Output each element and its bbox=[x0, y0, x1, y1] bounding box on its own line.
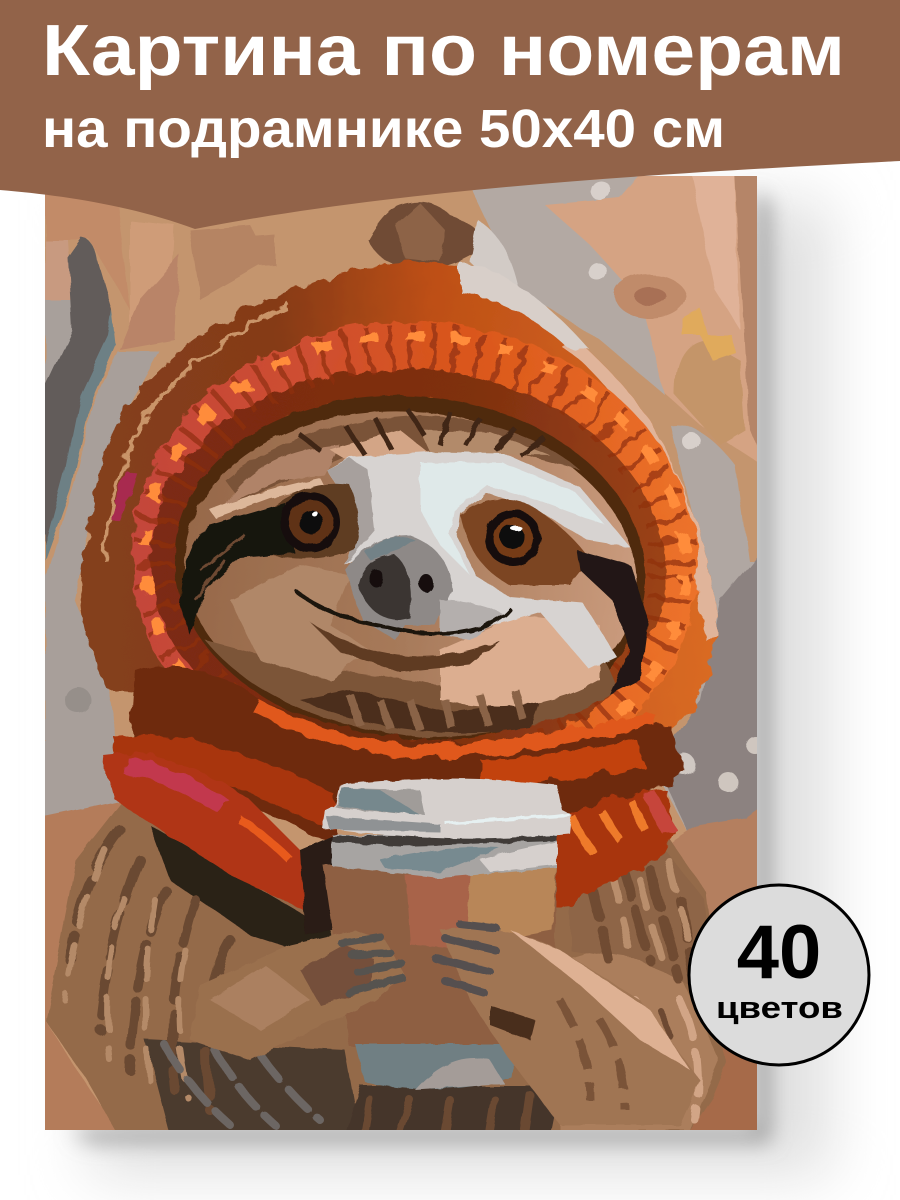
colours badge bbox=[689, 885, 869, 1065]
right eye bbox=[485, 510, 541, 566]
coffee cup bbox=[300, 778, 572, 1090]
cup sleeve bbox=[323, 865, 557, 1047]
title: Картина по номерам bbox=[42, 11, 845, 91]
left claws bbox=[342, 937, 402, 992]
painting background bbox=[30, 160, 770, 1150]
hat pompom bbox=[368, 202, 518, 286]
hat salmon band bbox=[146, 334, 684, 790]
dark gap beside cup bbox=[300, 837, 333, 930]
scarf right roll bbox=[553, 790, 672, 910]
left eye bbox=[280, 492, 340, 552]
painting bbox=[30, 160, 770, 1150]
cup collar bbox=[332, 835, 557, 878]
left paw bbox=[190, 930, 405, 1060]
lower face fur bbox=[205, 640, 618, 738]
right claws bbox=[435, 924, 496, 992]
subtitle: на подрамнике 50х40 см bbox=[42, 99, 725, 159]
sloth face bbox=[174, 394, 649, 740]
right paw bbox=[435, 924, 700, 1125]
knit scarf bbox=[103, 664, 685, 915]
cup bottom bbox=[355, 1044, 517, 1089]
white face mask bbox=[327, 452, 630, 670]
canvas shadow bbox=[70, 190, 830, 1175]
hat outer rim bbox=[81, 262, 716, 735]
forehead bbox=[225, 415, 580, 500]
fur body bbox=[45, 800, 727, 1135]
cup lid bbox=[322, 778, 572, 839]
scarf roll upper bbox=[112, 734, 335, 830]
knit hat bbox=[81, 262, 716, 802]
fur strokes bbox=[65, 830, 705, 1130]
left eye mask bbox=[268, 484, 359, 559]
hat inner band bbox=[153, 367, 663, 767]
colours label: цветов bbox=[716, 990, 843, 1025]
colour count: 40 bbox=[737, 910, 821, 995]
nose bbox=[345, 535, 505, 640]
smile bbox=[297, 592, 510, 634]
header banner bbox=[0, 0, 900, 229]
scarf collar bbox=[130, 664, 685, 845]
scarf roll lower bbox=[102, 752, 305, 910]
right eye mask bbox=[460, 499, 590, 585]
